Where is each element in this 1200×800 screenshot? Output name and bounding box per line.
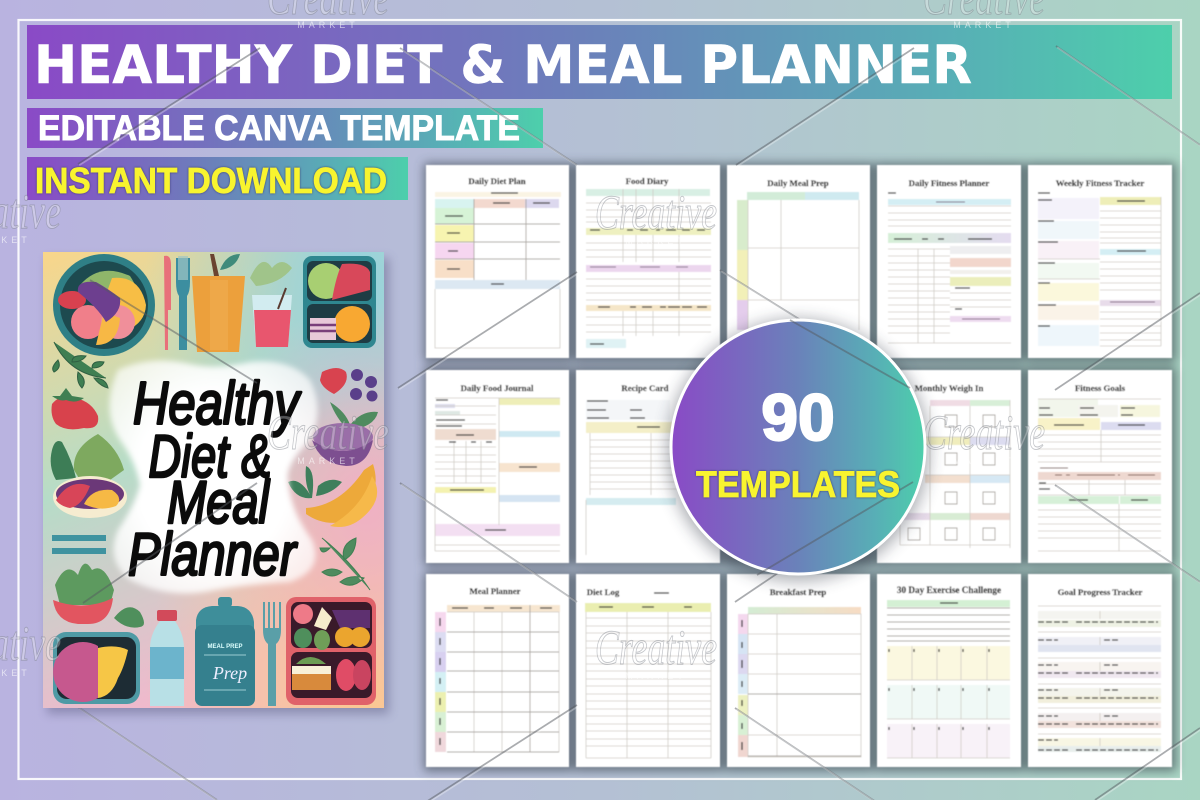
page: Meal Planner: Meal Planner [469, 586, 521, 596]
watermarks: Creative [923, 404, 1045, 460]
page: Daily Fitness Planner [877, 165, 1021, 358]
subtitle banner: editable canva template: EDITABLE CANVA TEMPLATE [38, 109, 520, 148]
badge: 90 templates: TEMPLATES [696, 464, 900, 505]
page: Diet Log: Diet Log [587, 587, 620, 597]
page: 30 Day Exercise Challenge: 30 Day Exercise Challenge [897, 585, 1001, 595]
watermarks: MARKET [297, 20, 359, 30]
icon: purple bowl with leaf [312, 402, 378, 466]
page: Fitness Goals [1028, 370, 1172, 563]
icon: pink drink with herbs [250, 262, 292, 347]
icon: tomato [52, 388, 98, 429]
title banner [27, 25, 1172, 99]
title banner: HEALTHY DIET & MEAL PLANNER [34, 35, 972, 96]
page: Daily Diet Plan: Daily Diet Plan [468, 176, 526, 186]
icon: meal prep jar: MEAL PREP [208, 644, 242, 650]
watermarks: Creative [595, 619, 717, 675]
icon: salad bowl [53, 564, 144, 628]
blob and cover title: Diet & [148, 423, 272, 490]
icon: lunch box top right [303, 256, 376, 348]
icon: knife and fork [164, 256, 190, 350]
watermarks: Creative [595, 184, 717, 240]
blob and cover title: Meal [167, 469, 270, 536]
icon: berries [320, 368, 378, 402]
page: Daily Fitness Planner: Daily Fitness Planner [909, 178, 989, 188]
page: Breakfast Prep: Breakfast Prep [770, 587, 826, 597]
icon: herb sprig right [320, 538, 370, 590]
page: Fitness Goals: Fitness Goals [1075, 383, 1126, 393]
icon: lunch box bottom right [286, 597, 376, 705]
page shadows [424, 163, 1176, 771]
page: Daily Diet Plan [426, 165, 569, 358]
page: 30 Day Exercise Challenge [877, 574, 1021, 767]
planner cover [43, 252, 384, 708]
page: Daily Food Journal [426, 370, 569, 563]
watermarks: MARKET [953, 20, 1015, 30]
blob and cover title: Healthy [133, 370, 302, 437]
template pages [426, 165, 1172, 767]
page: Goal Progress Tracker [1028, 574, 1172, 767]
watermarks [0, 0, 1045, 681]
page: Diet Log [576, 574, 720, 767]
badge: 90 templates: 90 [761, 380, 835, 454]
page: Monthly Weigh In [877, 370, 1021, 563]
watermarks: Creative [267, 404, 389, 460]
badge: 90 templates [671, 320, 925, 575]
page: Monthly Weigh In: Monthly Weigh In [915, 383, 983, 393]
watermarks: MARKET [953, 456, 1015, 466]
icon: fruit bowl [53, 254, 155, 356]
circle shadow [667, 319, 929, 581]
icon: teal text lines [52, 535, 106, 554]
subtitle banner: instant download: INSTANT DOWNLOAD [35, 160, 387, 201]
page: Recipe Card: Recipe Card [621, 383, 669, 393]
blob and cover title [109, 361, 317, 593]
page: Weekly Fitness Tracker: Weekly Fitness Tracker [1056, 178, 1144, 188]
watermarks: MARKET [625, 671, 687, 681]
watermarks: MARKET [625, 236, 687, 246]
watermarks: MARKET [297, 456, 359, 466]
cover shadow [47, 258, 389, 714]
icon: lunch box bottom left [53, 632, 140, 704]
icon: orange juice [192, 254, 245, 352]
icon: meal prep jar [195, 597, 255, 706]
page: Goal Progress Tracker: Goal Progress Tracker [1058, 587, 1143, 597]
page: Breakfast Prep [727, 574, 870, 767]
icon: water bottle [150, 610, 184, 706]
icon: fork bottom [263, 602, 281, 706]
page: Daily Food Journal: Daily Food Journal [461, 383, 534, 393]
page: Food Diary: Food Diary [626, 176, 669, 186]
icon: salad and plate [51, 434, 127, 518]
icon: herb sprig left [53, 342, 108, 388]
icon: meal prep jar: Prep [212, 663, 247, 683]
page: Daily Meal Prep [727, 165, 870, 358]
page: Daily Meal Prep: Daily Meal Prep [767, 178, 829, 188]
icon: banana and leaves [288, 464, 377, 527]
page: Recipe Card [576, 370, 720, 563]
blob and cover title: Planner [128, 521, 298, 588]
page: Meal Planner [426, 574, 569, 767]
page: Food Diary [576, 165, 720, 358]
page: Weekly Fitness Tracker [1028, 165, 1172, 358]
